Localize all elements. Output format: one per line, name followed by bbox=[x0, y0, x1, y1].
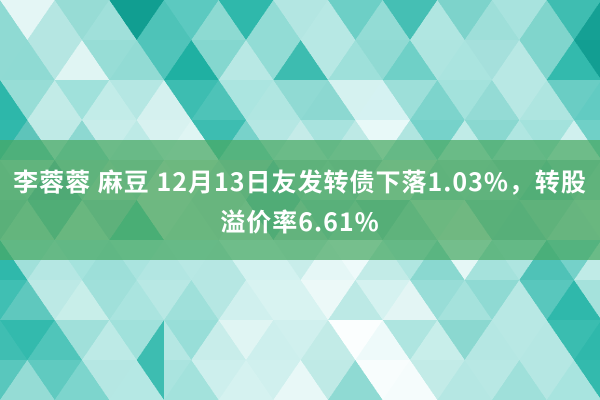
green translucent band bbox=[0, 140, 600, 260]
band tone wash bbox=[0, 160, 600, 240]
title bbox=[13, 163, 587, 239]
triangle mosaic: rows above the band bbox=[0, 0, 600, 160]
band interior triangles bbox=[0, 160, 600, 240]
triangle mosaic: rows below the band bbox=[0, 240, 600, 400]
title: 溢价率6.61% bbox=[220, 203, 380, 239]
title: 李蓉蓉 麻豆 12月13日友发转债下落1.03%，转股 bbox=[13, 163, 587, 199]
